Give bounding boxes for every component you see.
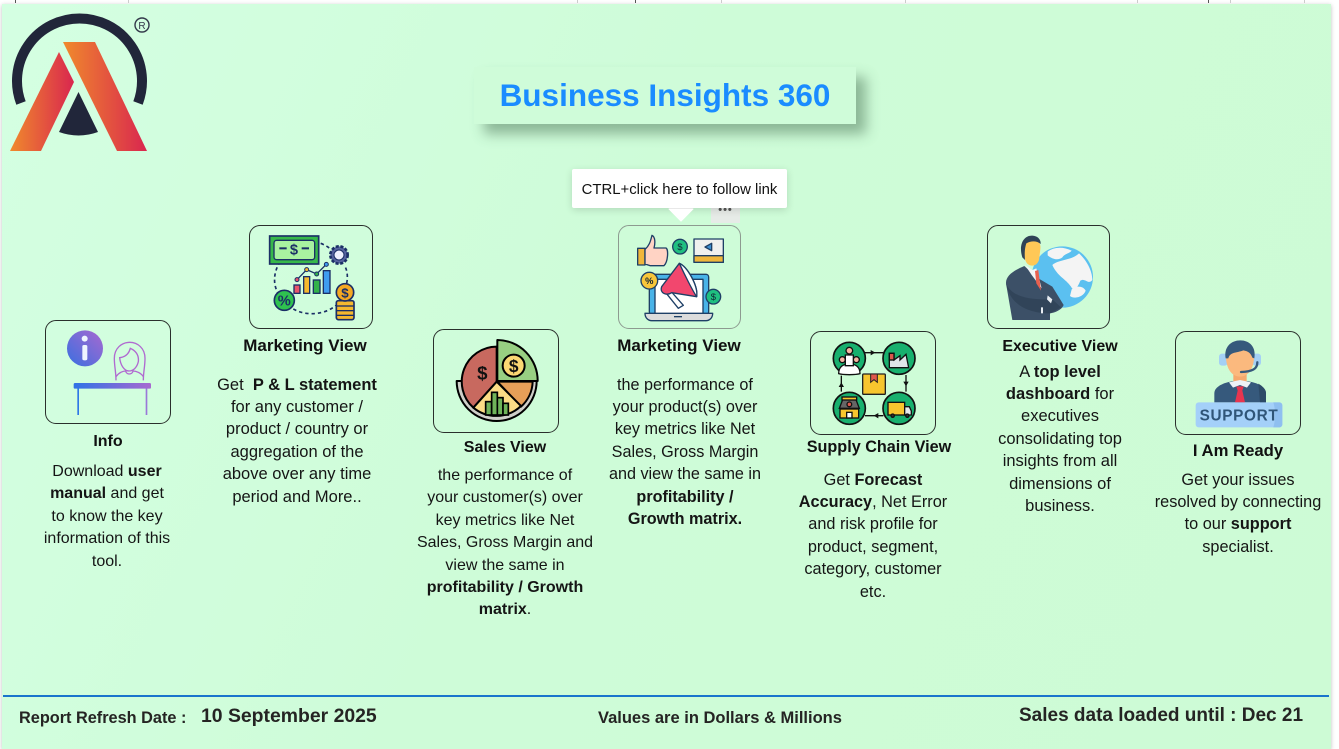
card: marketing view megaphone icon: [618, 225, 741, 329]
text: marketing view 1: period and More..: [232, 488, 362, 506]
text: executive view: insights from all: [1003, 452, 1117, 470]
text: i am ready: to our support: [1185, 515, 1291, 533]
footer: units note: Values are in Dollars & Millions: [598, 708, 842, 726]
text: sales view: matrix.: [479, 601, 531, 618]
card: marketing view megaphone icon: $: [711, 292, 717, 302]
text: executive view: business.: [1025, 497, 1095, 515]
footer: report refresh date: 10 September 2025: [201, 705, 377, 727]
card: marketing view finance icon: [249, 225, 373, 329]
title: [474, 67, 856, 124]
text: marketing view 2: key metrics like Net: [615, 420, 755, 438]
text: info: tool.: [92, 553, 122, 570]
text: info: information of this: [44, 530, 170, 547]
card: sales view icon: [433, 329, 559, 433]
text: info: Download user: [52, 463, 162, 480]
tooltip: [570, 168, 790, 222]
text: marketing view 2: the performance of: [617, 376, 753, 394]
text: marketing view 2: your product(s) over: [613, 398, 757, 416]
text: marketing view 1: product / country or: [226, 420, 368, 438]
text: executive view: consolidating top: [998, 430, 1122, 448]
card: sales view icon: $: [509, 356, 519, 376]
text: sales view: [417, 467, 593, 618]
text: i am ready: [1155, 470, 1321, 556]
card: marketing view megaphone icon: $: [677, 242, 683, 252]
text: sales view: your customer(s) over: [427, 489, 583, 506]
text: marketing view 2: [609, 376, 761, 528]
text: sales view: the performance of: [438, 467, 572, 484]
text: marketing view 1: above over any time: [223, 465, 371, 483]
text: marketing view 2: Growth matrix.: [628, 510, 742, 528]
text: info: manual and get: [50, 485, 164, 502]
text: marketing view 2: profitability /: [636, 488, 734, 506]
text: supply chain view: and risk profile for: [808, 515, 938, 533]
logo: R: [138, 21, 146, 32]
title: Business Insights 360: [500, 77, 830, 113]
footer divider: [3, 695, 1329, 697]
text: executive view: dashboard for: [1006, 385, 1114, 403]
text: marketing view 2: Sales, Gross Margin: [612, 443, 758, 461]
text: i am ready: Get your issues: [1181, 470, 1295, 488]
heading: marketing view 1: Marketing View: [243, 336, 367, 355]
text: supply chain view: [799, 470, 947, 601]
card: sales view icon: $: [477, 362, 488, 383]
tooltip: CTRL+click here to follow link: [582, 182, 777, 198]
button: more options: [711, 205, 740, 223]
card: marketing view finance icon: $: [290, 242, 298, 258]
text: supply chain view: etc.: [860, 583, 886, 601]
card: support icon: [1175, 331, 1301, 435]
text: supply chain view: product, segment,: [808, 538, 938, 556]
card: supply chain icon: [810, 331, 936, 435]
text: marketing view 2: and view the same in: [609, 465, 761, 483]
text: supply chain view: Accuracy, Net Error: [799, 493, 947, 511]
text: i am ready: resolved by connecting: [1155, 493, 1321, 511]
text: info: [44, 463, 170, 570]
logo: [10, 14, 150, 151]
card: info icon: [45, 320, 171, 424]
heading: supply chain view: Supply Chain View: [807, 438, 951, 456]
text: sales view: key metrics like Net: [436, 512, 574, 529]
text: executive view: executives: [1021, 407, 1099, 425]
text: marketing view 1: for any customer /: [231, 398, 363, 416]
footer: sales data loaded: Sales data loaded until : Dec 21: [1019, 704, 1303, 726]
heading: executive view: Executive View: [1002, 338, 1118, 354]
heading: info: Info: [93, 433, 123, 450]
text: executive view: dimensions of: [1009, 475, 1111, 493]
card: marketing view finance icon: %: [278, 294, 291, 310]
text: i am ready: specialist.: [1202, 538, 1274, 556]
text: executive view: [998, 362, 1122, 515]
text: supply chain view: category, customer: [804, 560, 942, 578]
text: sales view: Sales, Gross Margin and: [417, 534, 593, 551]
text: sales view: profitability / Growth: [427, 579, 583, 596]
footer: report refresh label: Report Refresh Date :: [19, 708, 186, 726]
card: marketing view megaphone icon: %: [645, 276, 654, 286]
text: supply chain view: Get Forecast: [824, 470, 922, 488]
heading: sales view: Sales View: [464, 439, 546, 456]
card: support icon: SUPPORT: [1200, 408, 1278, 425]
text: marketing view 1: Get P & L statement: [217, 376, 377, 394]
text: marketing view 1: aggregation of the: [230, 443, 364, 461]
text: info: to know the key: [51, 508, 163, 525]
heading: marketing view 2: Marketing View: [617, 336, 741, 355]
text: executive view: A top level: [1019, 362, 1101, 380]
card: executive icon: [987, 225, 1110, 329]
text: marketing view 1: [217, 376, 377, 506]
card: marketing view finance icon: $: [341, 285, 349, 300]
text: sales view: view the same in: [445, 557, 565, 574]
heading: i am ready: I Am Ready: [1193, 440, 1283, 460]
